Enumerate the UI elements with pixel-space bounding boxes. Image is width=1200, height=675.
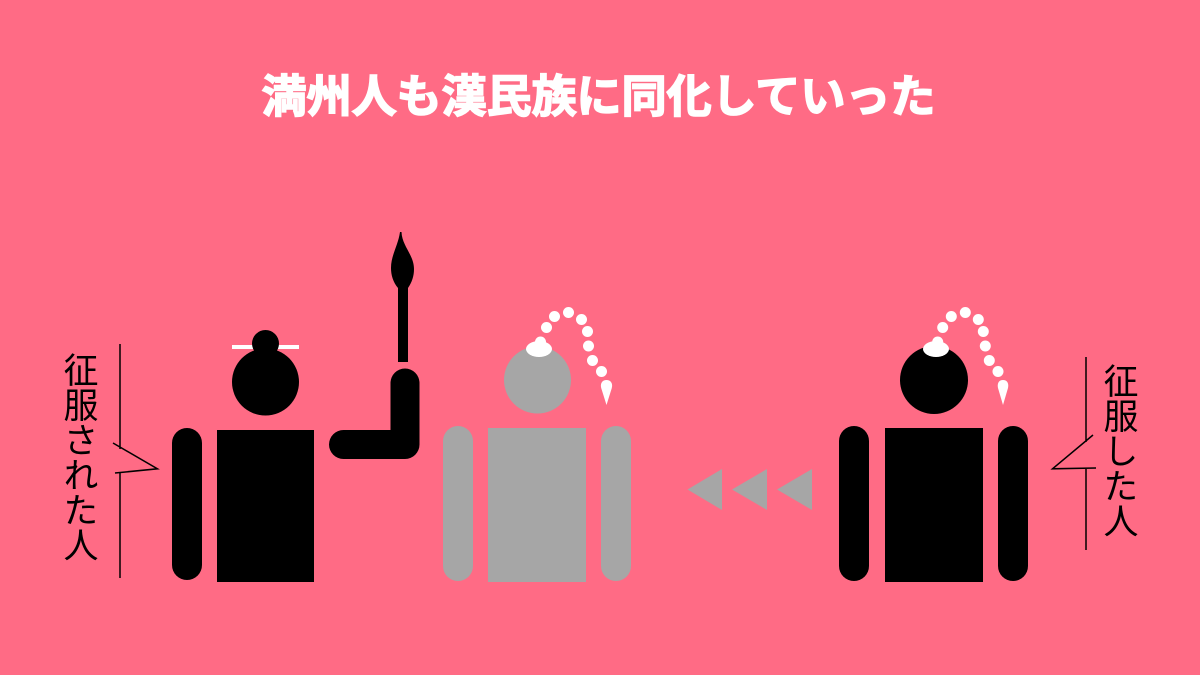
torso xyxy=(488,428,586,582)
brush xyxy=(391,232,414,362)
callout: conquering person xyxy=(1052,357,1138,550)
arrows: direction of assimilation xyxy=(688,469,812,510)
queue hair xyxy=(923,307,1008,405)
callout label: 征服された人 xyxy=(58,352,98,562)
figure: conquering person xyxy=(839,307,1028,582)
torso xyxy=(217,430,314,582)
queue hair xyxy=(526,307,612,405)
callout: conquered person xyxy=(58,344,158,578)
head xyxy=(504,346,571,414)
head xyxy=(900,346,968,414)
callout bracket xyxy=(113,344,158,578)
callout bracket xyxy=(1052,357,1096,550)
raised arm xyxy=(329,368,420,459)
left arm xyxy=(443,426,473,581)
hair bun xyxy=(252,330,279,357)
figure: assimilated person in grey xyxy=(443,307,631,582)
head xyxy=(232,348,299,416)
right arm xyxy=(601,426,631,581)
left arm xyxy=(839,426,869,581)
left arm xyxy=(172,428,202,580)
torso xyxy=(885,428,983,582)
figure: conquered person holding brush xyxy=(172,232,420,582)
title: 満州人も漢民族に同化していった xyxy=(262,71,935,122)
hair stick xyxy=(232,345,299,349)
right arm xyxy=(998,426,1028,581)
callout label: 征服した人 xyxy=(1098,363,1138,538)
